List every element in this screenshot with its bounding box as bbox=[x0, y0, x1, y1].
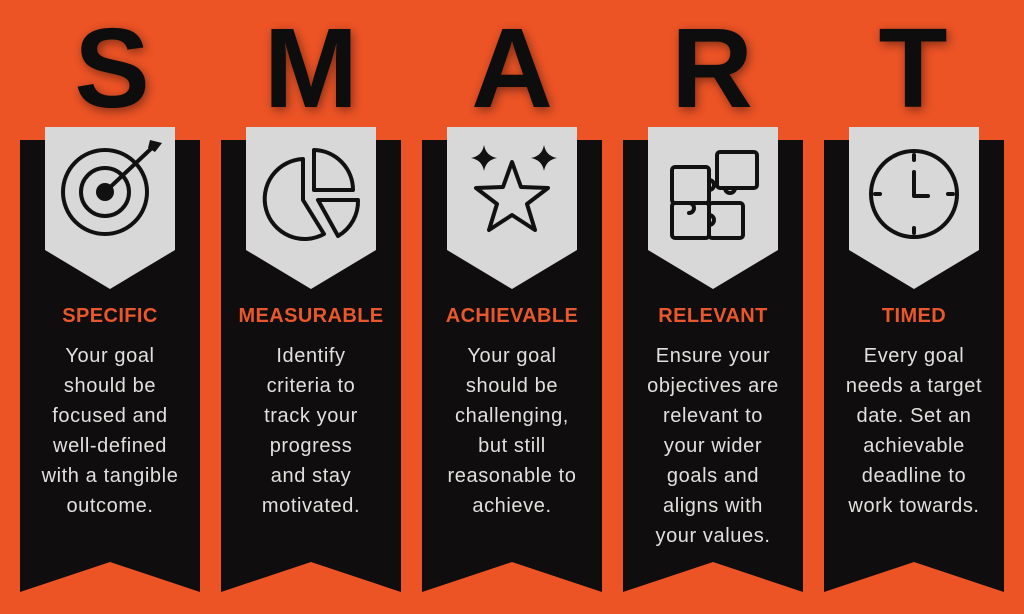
panel: timed: TIMED bbox=[882, 305, 946, 327]
title: SMART letters: T bbox=[878, 5, 948, 131]
icon: target bbox=[45, 127, 175, 289]
panel: specific: Your goal bbox=[65, 345, 155, 367]
panel: achievable: ACHIEVABLE bbox=[446, 305, 578, 327]
panel: specific: outcome. bbox=[66, 495, 154, 517]
icon: pie chart bbox=[246, 127, 376, 289]
panel: timed: deadline to bbox=[862, 465, 966, 487]
panel: relevant bbox=[623, 127, 803, 592]
panel: relevant: relevant to bbox=[663, 405, 763, 427]
panel: specific: SPECIFIC bbox=[62, 305, 158, 327]
panel: achievable: achieve. bbox=[472, 495, 552, 517]
panel: measurable bbox=[221, 127, 401, 592]
panel: relevant: Ensure your bbox=[656, 345, 770, 367]
title: SMART letters: A bbox=[471, 5, 553, 131]
panel: measurable: criteria to bbox=[267, 375, 355, 397]
title: SMART letters: R bbox=[671, 5, 753, 131]
panel: timed: work towards. bbox=[847, 495, 980, 517]
panel: relevant: aligns with bbox=[663, 495, 763, 517]
panel: timed: needs a target bbox=[846, 375, 982, 397]
panel: specific bbox=[20, 127, 200, 592]
panel: measurable: Identify bbox=[276, 345, 346, 367]
title: SMART letters bbox=[74, 5, 948, 131]
panel: specific: should be bbox=[64, 375, 156, 397]
panel: timed bbox=[824, 127, 1004, 592]
panel: measurable: and stay bbox=[271, 465, 351, 487]
panel: measurable: progress bbox=[270, 435, 352, 457]
panel: achievable: Your goal bbox=[467, 345, 557, 367]
panel: relevant: RELEVANT bbox=[658, 305, 768, 327]
panel: relevant: objectives are bbox=[647, 375, 779, 397]
title: SMART letters: M bbox=[264, 5, 358, 131]
icon: star with sparkles bbox=[447, 127, 577, 289]
panel: specific: focused and bbox=[52, 405, 168, 427]
title: SMART letters: S bbox=[74, 5, 150, 131]
panel: measurable: motivated. bbox=[262, 495, 360, 517]
panel: achievable: but still bbox=[478, 435, 546, 457]
panel: specific: with a tangible bbox=[41, 465, 178, 487]
panel: achievable bbox=[422, 127, 602, 592]
icon: puzzle bbox=[648, 127, 778, 289]
icon: clock bbox=[849, 127, 979, 289]
panel: measurable: MEASURABLE bbox=[238, 305, 384, 327]
panel: timed: date. Set an bbox=[856, 405, 972, 427]
panel: timed: Every goal bbox=[864, 345, 964, 367]
panel: measurable: track your bbox=[264, 405, 358, 427]
panel: relevant: your wider bbox=[664, 435, 762, 457]
panel: relevant: your values. bbox=[655, 525, 771, 547]
panel: specific: well-defined bbox=[52, 435, 167, 457]
panel: timed: achievable bbox=[863, 435, 965, 457]
panel: relevant: goals and bbox=[667, 465, 759, 487]
panel: achievable: reasonable to bbox=[447, 465, 577, 487]
panel: achievable: challenging, bbox=[455, 405, 569, 427]
panel: achievable: should be bbox=[466, 375, 558, 397]
